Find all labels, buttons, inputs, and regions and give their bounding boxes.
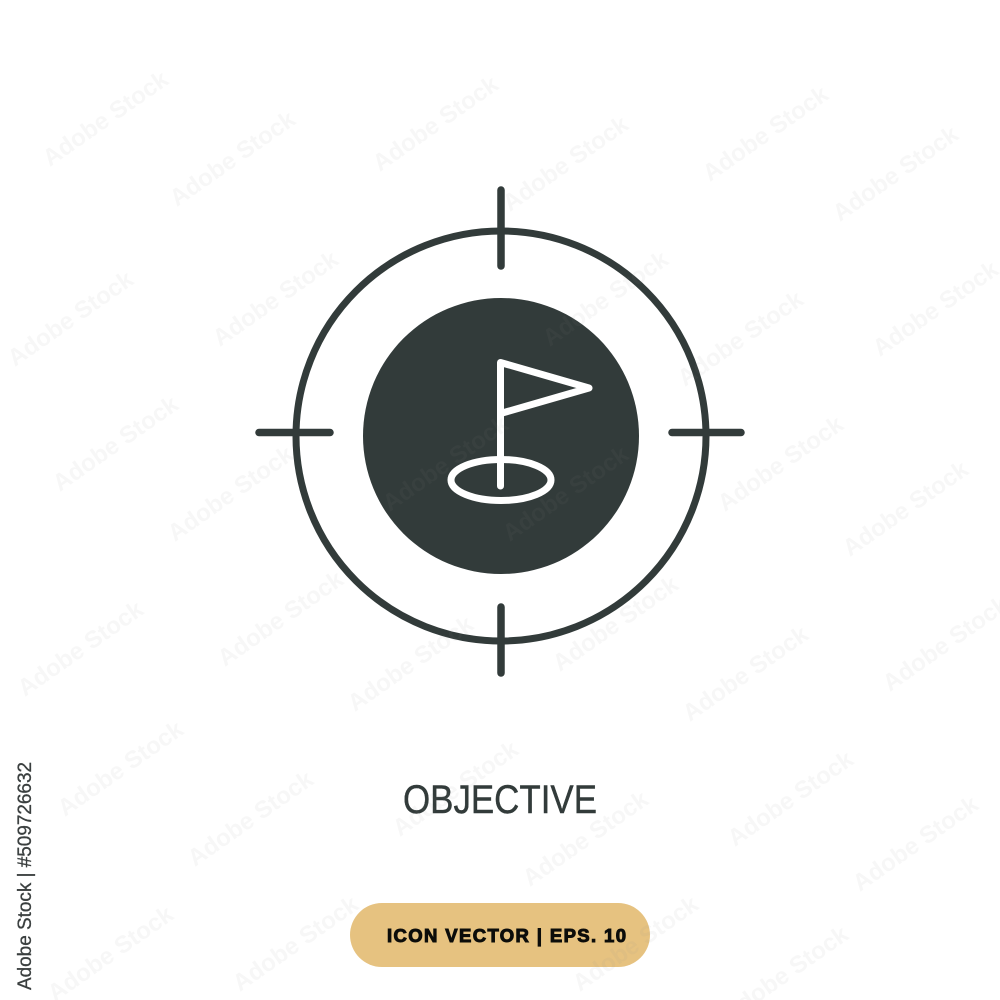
stock watermark pattern: Adobe Stock	[228, 890, 364, 997]
badge	[350, 903, 650, 967]
stock watermark pattern: Adobe Stock	[388, 735, 524, 842]
badge pill	[350, 903, 650, 967]
stock watermark pattern: Adobe Stock	[838, 455, 974, 562]
stock watermark pattern: Adobe Stock	[368, 70, 504, 177]
badge label: ICON VECTOR | EPS. 10	[387, 925, 626, 946]
stock watermark pattern: Adobe Stock	[378, 410, 514, 517]
stock watermark pattern: Adobe Stock	[698, 80, 834, 187]
stock watermark pattern: Adobe Stock	[3, 265, 139, 372]
stock watermark pattern: Adobe Stock	[498, 440, 634, 547]
stock watermark pattern: Adobe Stock	[208, 245, 344, 352]
title: OBJECTIVE	[403, 778, 597, 822]
stock watermark pattern: Adobe Stock	[678, 620, 814, 727]
stock watermark pattern: Adobe Stock	[723, 745, 859, 852]
stock watermark pattern: Adobe Stock	[165, 105, 301, 212]
stock watermark pattern: Adobe Stock	[163, 440, 299, 547]
stock watermark pattern: Adobe Stock	[568, 890, 704, 997]
stock watermark pattern: Adobe Stock	[713, 410, 849, 517]
stock watermark pattern: Adobe Stock	[673, 285, 809, 392]
icon: objective target	[259, 190, 741, 673]
stock watermark pattern: Adobe Stock	[828, 120, 964, 227]
stock watermark pattern: Adobe Stock	[343, 610, 479, 717]
stock watermark pattern: Adobe Stock	[848, 790, 984, 897]
stock watermark pattern: Adobe Stock	[183, 765, 319, 872]
stock watermark pattern: Adobe Stock	[548, 570, 684, 677]
stock watermark pattern: Adobe Stock	[518, 785, 654, 892]
stock watermark pattern: Adobe Stock	[13, 595, 149, 702]
stock watermark pattern: Adobe Stock	[48, 390, 184, 497]
crosshair ticks	[259, 190, 741, 673]
stock watermark pattern: Adobe Stock	[538, 245, 674, 352]
stock watermark pattern: Adobe Stock	[38, 65, 174, 172]
icon: golf flag in hole	[451, 362, 589, 500]
stock credit: Adobe Stock | #509726632	[15, 762, 36, 990]
target ring	[296, 231, 706, 641]
central filled disc	[363, 298, 639, 574]
stock watermark pattern: Adobe Stock	[498, 110, 634, 217]
stock watermark pattern: Adobe Stock	[53, 715, 189, 822]
stock watermark pattern: Adobe Stock	[213, 565, 349, 672]
stock watermark pattern: Adobe Stock	[868, 255, 1000, 362]
